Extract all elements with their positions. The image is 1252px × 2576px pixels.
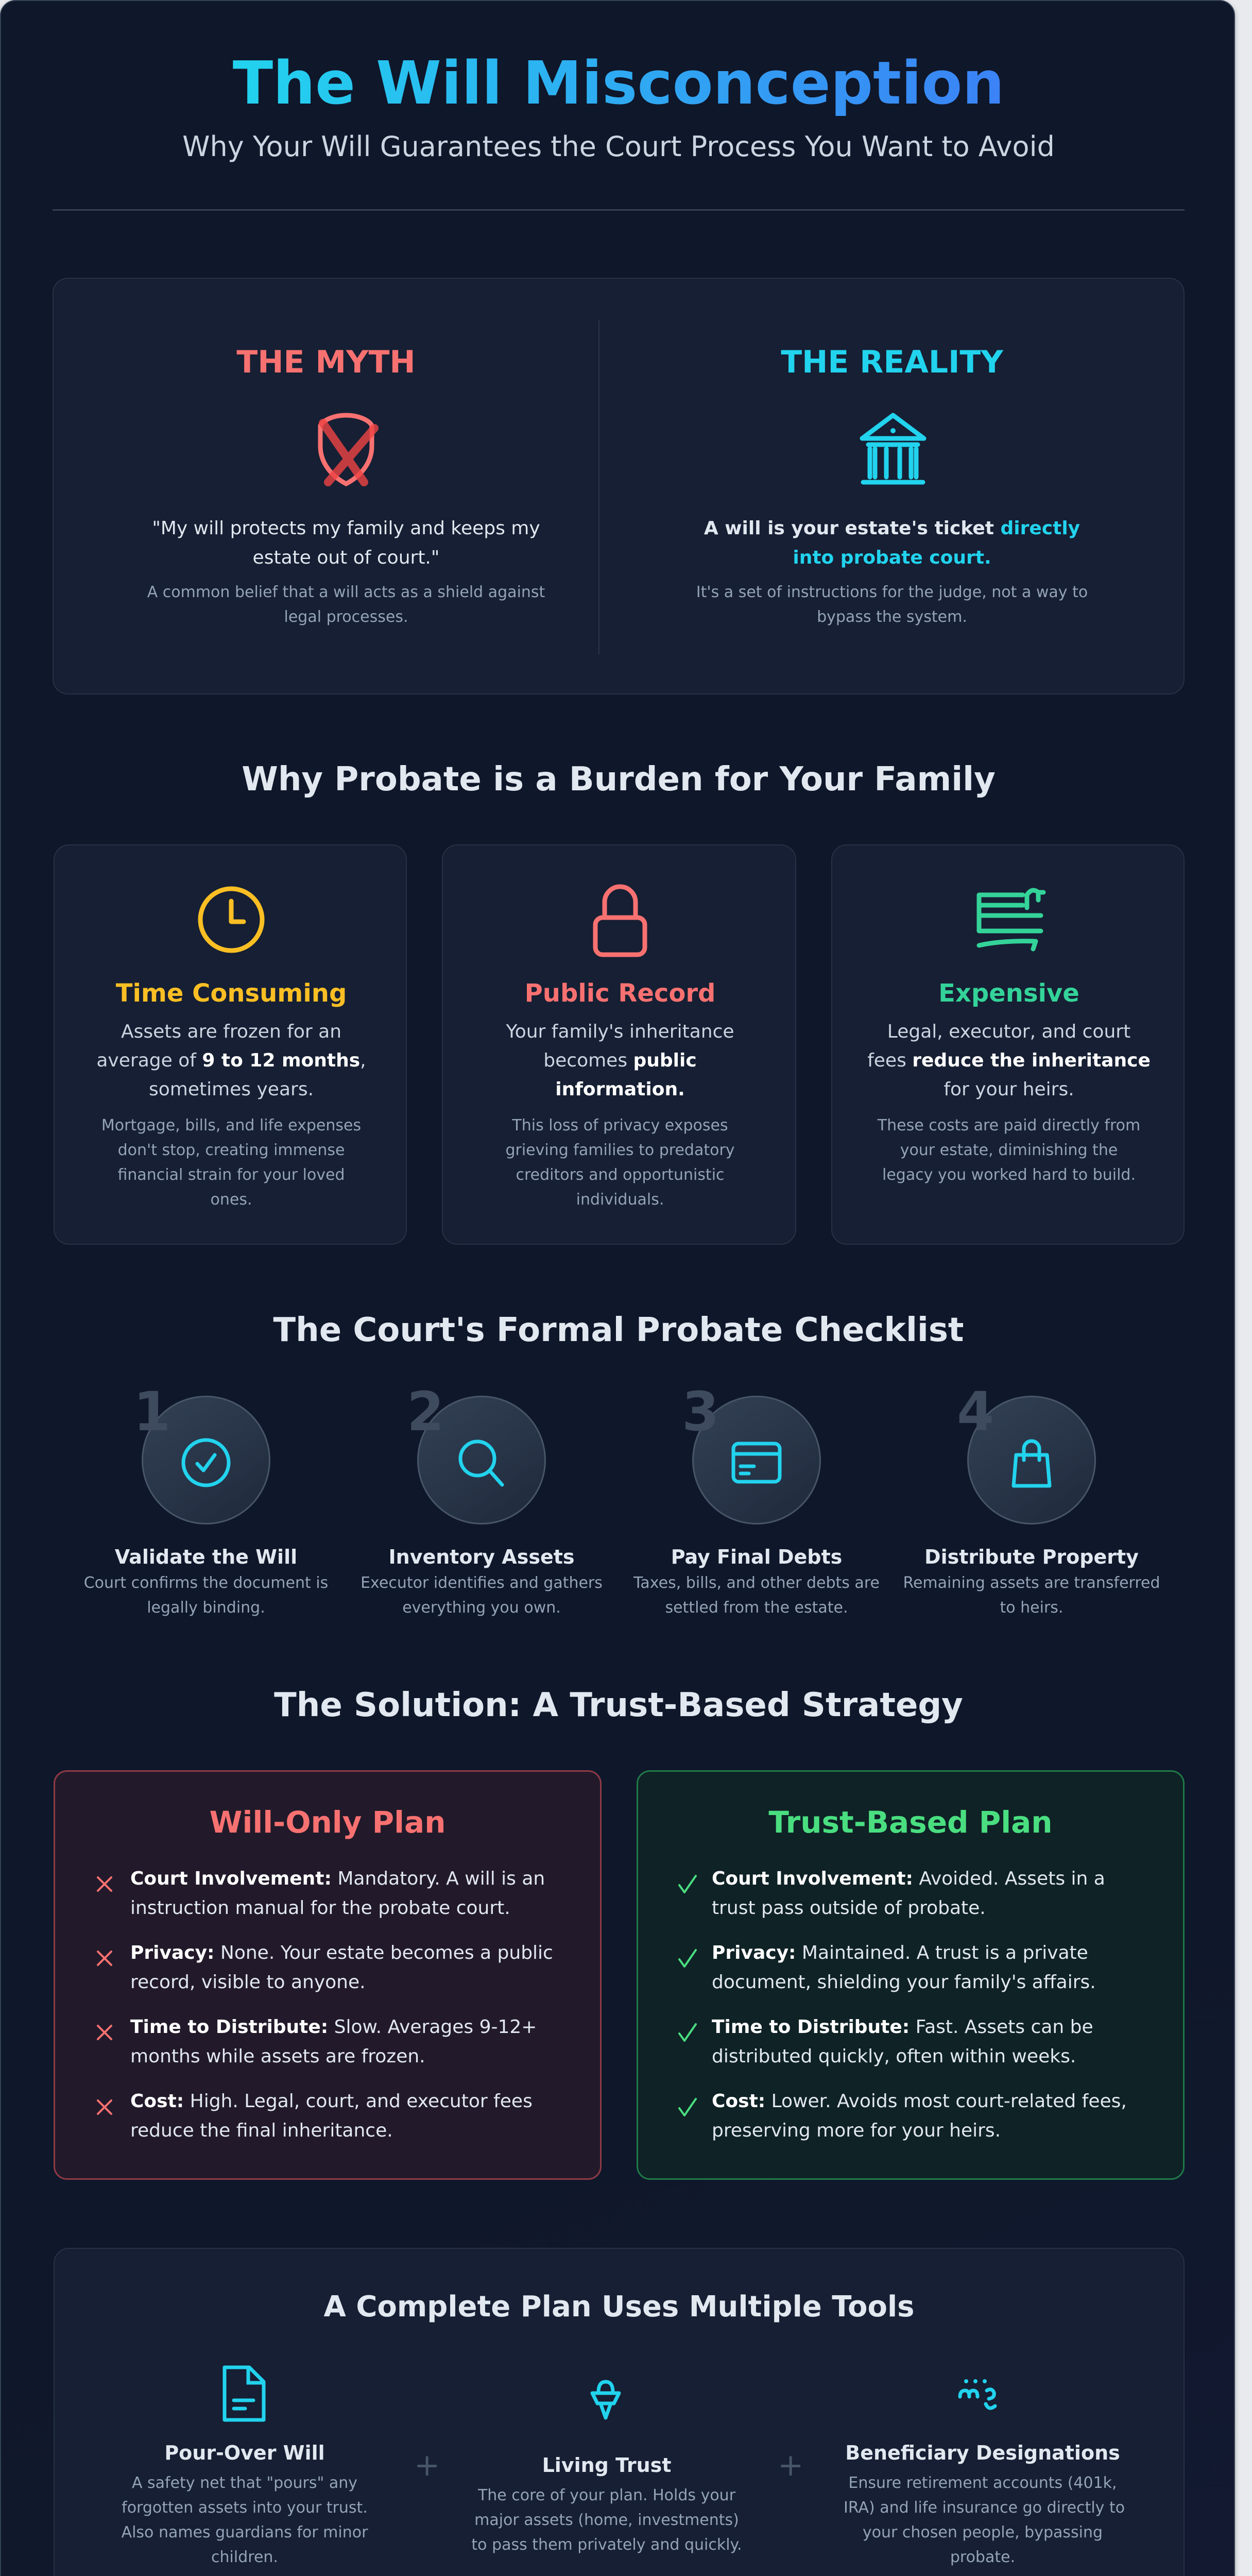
panel: public record: grieving families to predatory xyxy=(505,1141,735,1159)
reality note: It's a set of instructions for the judge, not a way to xyxy=(696,583,1088,601)
panel: time consuming: average of 9 to 12 months, xyxy=(96,1050,366,1071)
panel: complete plan tools: major assets (home, investments) xyxy=(474,2511,739,2529)
icon: document xyxy=(218,2363,270,2425)
myth note xyxy=(147,583,545,626)
panel: complete plan tools: Also names guardians for minor xyxy=(122,2523,368,2541)
panel: complete plan tools: probate. xyxy=(950,2548,1015,2566)
step 3 xyxy=(633,1380,880,1617)
myth quote: estate out of court." xyxy=(253,547,439,568)
panel: will-only plan: Will-Only Plan xyxy=(209,1805,446,1840)
reality statement: A will is your estate's ticket directly xyxy=(704,518,1080,539)
panel: complete plan tools: + xyxy=(414,2447,440,2483)
title: The Will Misconception xyxy=(233,49,1004,118)
panel: will-only plan: reduce the final inheritance. xyxy=(130,2120,393,2141)
icon: trust xyxy=(585,2377,626,2423)
heading: burden: Why Probate is a Burden for Your Family xyxy=(242,760,996,799)
panel: time consuming: financial strain for your loved xyxy=(117,1166,345,1184)
panel: complete plan tools: + xyxy=(778,2447,803,2483)
step 2: 2 xyxy=(407,1380,444,1443)
panel: will-only plan: months while assets are frozen. xyxy=(130,2046,425,2067)
panel: will-only plan: Cost: High. Legal, court, and executor fees xyxy=(130,2091,533,2112)
heading: solution: The Solution: A Trust-Based Strategy xyxy=(274,1686,963,1724)
icon: card xyxy=(731,1442,782,1484)
panel: complete plan tools: A safety net that "pours" any xyxy=(132,2474,357,2492)
reality note: bypass the system. xyxy=(817,608,967,626)
myth note: A common belief that a will acts as a shield against xyxy=(147,583,545,601)
step 3: Taxes, bills, and other debts are xyxy=(633,1574,880,1592)
panel: expensive: These costs are paid directly from xyxy=(878,1116,1140,1134)
step 4: Distribute Property xyxy=(924,1546,1139,1568)
icon: money xyxy=(976,888,1045,951)
panel: public record: Your family's inheritance xyxy=(506,1021,734,1042)
step 1: Court confirms the document is xyxy=(84,1574,328,1592)
panel: public record: information. xyxy=(555,1079,685,1100)
panel: expensive: Legal, executor, and court xyxy=(887,1021,1130,1042)
step 3: Pay Final Debts xyxy=(671,1546,842,1568)
panel: public record: becomes public xyxy=(543,1050,697,1071)
panel: trust-based plan: Court Involvement: Avoided. Assets in a xyxy=(712,1868,1105,1889)
panel: trust-based plan: preserving more for your heirs. xyxy=(712,2120,1001,2141)
icon: clock xyxy=(198,886,265,953)
panel: expensive: your estate, diminishing the xyxy=(900,1141,1118,1159)
panel: complete plan tools: A Complete Plan Uses Multiple Tools xyxy=(323,2290,915,2324)
step 4: to heirs. xyxy=(1000,1599,1063,1617)
panel: public record xyxy=(442,844,796,1245)
panel: time consuming: Assets are frozen for an xyxy=(121,1021,341,1042)
panel: expensive xyxy=(831,844,1185,1245)
panel: complete plan tools: Beneficiary Designations xyxy=(845,2442,1120,2464)
step 1: Validate the Will xyxy=(115,1546,297,1568)
step 1 xyxy=(84,1380,328,1617)
panel: time consuming xyxy=(54,844,407,1245)
panel: time consuming: sometimes years. xyxy=(149,1079,314,1100)
myth note: legal processes. xyxy=(284,608,408,626)
panel: complete plan tools: to pass them privately and quickly. xyxy=(471,2536,742,2554)
step 2: Executor identifies and gathers xyxy=(361,1574,603,1592)
panel: trust-based plan: document, shielding your family's affairs. xyxy=(712,1972,1096,1993)
step 2: Inventory Assets xyxy=(388,1546,575,1568)
icon: lock xyxy=(593,884,647,957)
panel: complete plan tools: IRA) and life insurance go directly to xyxy=(844,2499,1125,2517)
panel: public record: individuals. xyxy=(576,1191,664,1209)
panel: trust-based plan: trust pass outside of probate. xyxy=(712,1897,986,1919)
reality note xyxy=(696,583,1088,626)
panel: will-only plan: instruction manual for the probate court. xyxy=(130,1897,510,1919)
icon: magnifier xyxy=(458,1439,504,1487)
panel: trust-based plan: Cost: Lower. Avoids most court-related fees, xyxy=(712,2091,1127,2112)
icon: bag xyxy=(1003,1434,1060,1491)
step 1: legally binding. xyxy=(147,1599,265,1617)
myth quote xyxy=(152,518,540,568)
icon: beneficiaries xyxy=(955,2375,1001,2421)
step 2: everything you own. xyxy=(402,1599,561,1617)
panel: myth vs reality xyxy=(53,278,1185,694)
panel: trust-based plan: Trust-Based Plan xyxy=(768,1805,1053,1840)
step 3: 3 xyxy=(682,1380,719,1443)
panel: trust-based plan xyxy=(637,1770,1185,2180)
panel: public record: This loss of privacy exposes xyxy=(512,1116,728,1134)
heading: checklist: The Court's Formal Probate Checklist xyxy=(273,1311,964,1349)
panel: will-only plan: Court Involvement: Mandatory. A will is an xyxy=(130,1868,545,1889)
panel: complete plan tools xyxy=(54,2248,1185,2576)
step 3: settled from the estate. xyxy=(665,1599,848,1617)
panel: complete plan tools: children. xyxy=(211,2548,278,2566)
panel: trust-based plan: Time to Distribute: Fast. Assets can be xyxy=(712,2016,1093,2038)
panel: complete plan tools: The core of your plan. Holds your xyxy=(478,2486,735,2504)
icon: check circle xyxy=(181,1438,231,1487)
panel: time consuming: Time Consuming xyxy=(116,979,347,1008)
panel: complete plan tools: Pour-Over Will xyxy=(164,2442,325,2464)
step 2 xyxy=(361,1380,603,1617)
myth quote: "My will protects my family and keeps my xyxy=(152,518,540,539)
reality statement xyxy=(704,518,1080,568)
panel: complete plan tools: Ensure retirement accounts (401k, xyxy=(848,2474,1117,2492)
step 4: Remaining assets are transferred xyxy=(903,1574,1160,1592)
step 4: 4 xyxy=(957,1380,994,1443)
panel: trust-based plan: distributed quickly, often within weeks. xyxy=(712,2046,1076,2067)
panel: expensive: fees reduce the inheritance xyxy=(867,1050,1151,1071)
panel: complete plan tools: forgotten assets into your trust. xyxy=(122,2499,368,2517)
panel: time consuming: Mortgage, bills, and life expenses xyxy=(101,1116,361,1134)
panel: complete plan tools: Living Trust xyxy=(542,2454,671,2477)
step 1: 1 xyxy=(133,1380,170,1443)
panel: will-only plan: Time to Distribute: Slow. Averages 9-12+ xyxy=(130,2016,537,2038)
panel: public record: Public Record xyxy=(525,979,715,1008)
panel: public record: creditors and opportunistic xyxy=(516,1166,725,1184)
step 4 xyxy=(903,1380,1160,1617)
icon: courthouse xyxy=(860,413,926,484)
myth heading: THE MYTH xyxy=(236,344,416,380)
icon: shield crossed xyxy=(318,413,379,486)
reality heading: THE REALITY xyxy=(781,344,1003,380)
reality statement: into probate court. xyxy=(793,547,991,568)
panel: will-only plan xyxy=(54,1770,602,2180)
subtitle: Why Your Will Guarantees the Court Process You Want to Avoid xyxy=(182,130,1055,163)
panel: expensive: for your heirs. xyxy=(944,1079,1074,1100)
panel: time consuming: don't stop, creating immense xyxy=(118,1141,345,1159)
panel: complete plan tools: your chosen people, bypassing xyxy=(863,2523,1103,2541)
panel: will-only plan: Privacy: None. Your estate becomes a public xyxy=(130,1942,553,1963)
panel: expensive: Expensive xyxy=(938,979,1079,1008)
panel: will-only plan: record, visible to anyone. xyxy=(130,1972,366,1993)
panel: time consuming: ones. xyxy=(210,1191,252,1209)
panel: trust-based plan: Privacy: Maintained. A trust is a private xyxy=(712,1942,1088,1963)
panel: expensive: legacy you worked hard to build. xyxy=(882,1166,1136,1184)
